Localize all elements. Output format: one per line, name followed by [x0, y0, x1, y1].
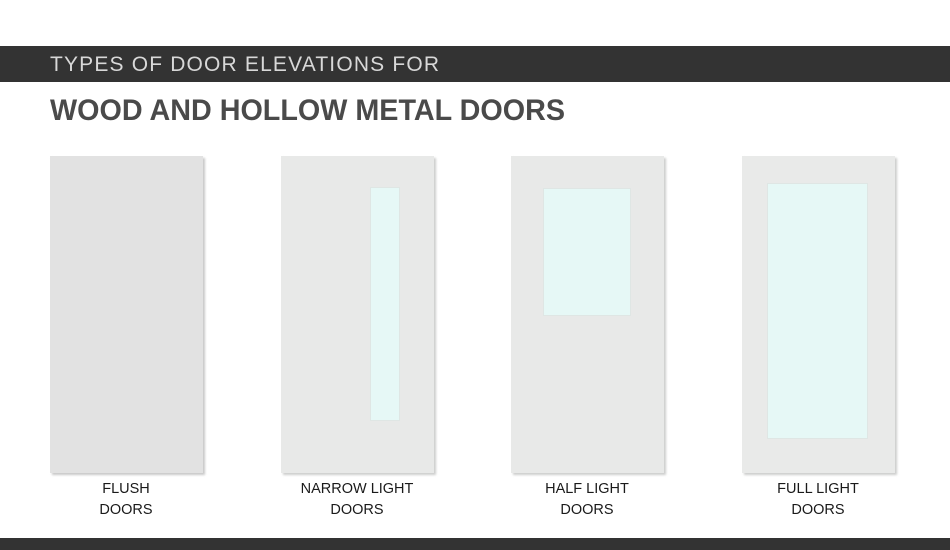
label: full light doors: FULL LIGHT — [777, 481, 859, 497]
panel: narrow light door — [281, 156, 436, 518]
label: narrow light doors: DOORS — [330, 502, 384, 518]
title banner — [0, 46, 950, 82]
label: narrow light doors: NARROW LIGHT — [301, 481, 414, 497]
label: flush doors: DOORS — [99, 502, 153, 518]
window: half light — [544, 188, 630, 316]
window: narrow light — [370, 188, 400, 420]
label: full light doors: DOORS — [791, 502, 845, 518]
title line 2: WOOD AND HOLLOW METAL DOORS — [50, 94, 565, 127]
label: flush doors: FLUSH — [102, 481, 150, 497]
title line 1: TYPES OF DOOR ELEVATIONS FOR — [50, 53, 439, 76]
window: full light — [768, 184, 868, 438]
footer bar — [0, 538, 950, 550]
label: half light doors: DOORS — [560, 502, 614, 518]
panel: full light door — [742, 156, 897, 518]
panel: flush door — [50, 156, 205, 518]
label: half light doors: HALF LIGHT — [545, 481, 629, 497]
panel: half light door — [511, 156, 666, 518]
